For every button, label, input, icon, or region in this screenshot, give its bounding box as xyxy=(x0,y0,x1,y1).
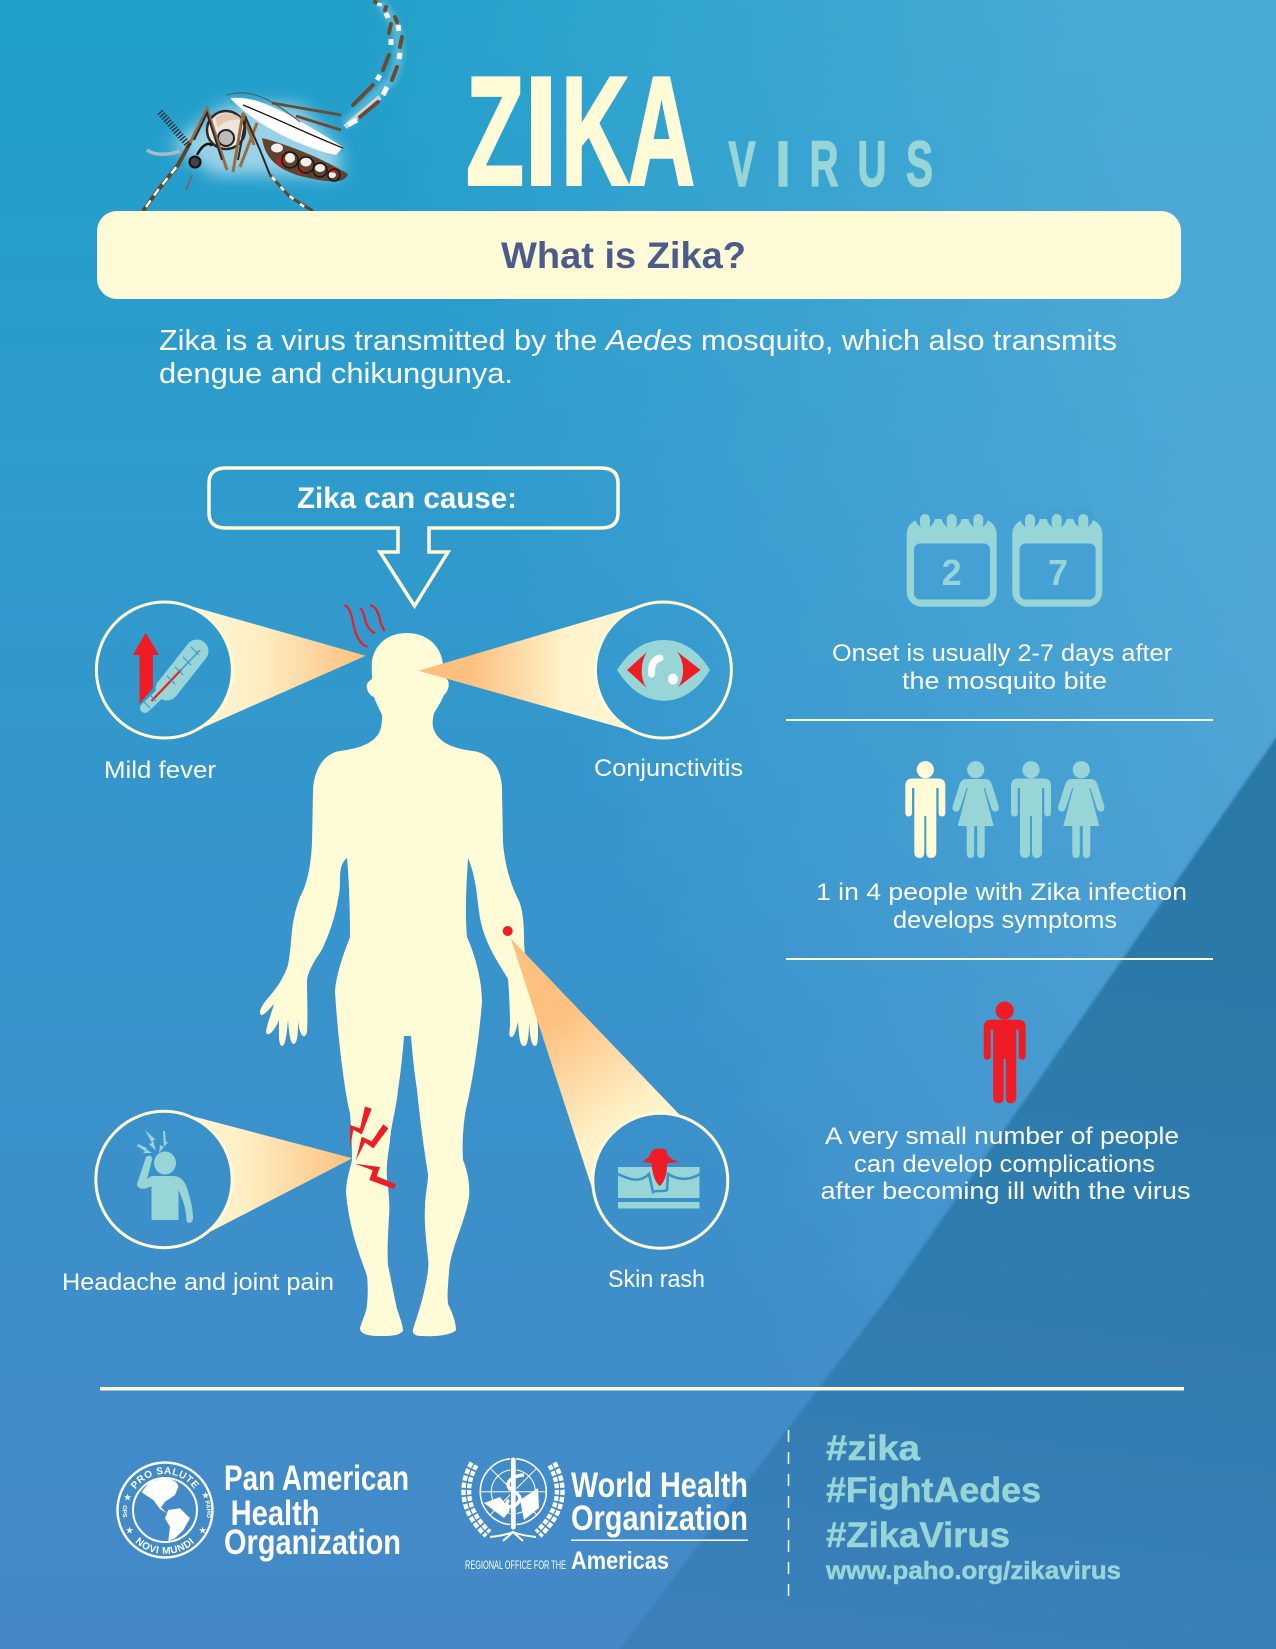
seal: ★ xyxy=(126,1526,134,1535)
icon: calendar 7: 7 xyxy=(1048,552,1068,593)
ring xyxy=(593,1113,728,1248)
hashtags xyxy=(825,1429,1121,1585)
icon: red eye xyxy=(617,640,710,701)
beam xyxy=(174,1111,352,1233)
hashtags: #ZikaVirus xyxy=(826,1516,1010,1555)
hashtags: #zika xyxy=(826,1429,921,1468)
title: VIRUS: R xyxy=(810,128,838,200)
seal: ★ xyxy=(124,1493,132,1502)
callout: Zika can cause xyxy=(209,468,618,606)
text xyxy=(816,879,1187,934)
intro text: Zika is a virus transmitted by the Aedes mosquito, which also transmits xyxy=(159,325,1117,357)
panel: 1 in 4 xyxy=(816,761,1187,934)
title: VIRUS: U xyxy=(858,128,886,200)
label: Mild fever xyxy=(104,757,216,784)
title: ZIKA xyxy=(466,44,695,218)
panel: headache and joint pain xyxy=(62,1111,352,1296)
intro text: dengue and chikungunya. xyxy=(159,358,513,390)
regional office xyxy=(465,1547,669,1575)
icon: calendar 2 xyxy=(907,506,997,607)
logo: WHO xyxy=(465,1457,748,1575)
beam xyxy=(418,604,643,731)
name xyxy=(224,1459,409,1562)
text: 1 in 4 people with Zika infection xyxy=(816,879,1187,906)
text: after becoming ill with the virus xyxy=(820,1178,1190,1205)
heading: What is Zika? xyxy=(501,235,746,276)
emblem xyxy=(466,1457,560,1541)
ring xyxy=(96,1111,232,1248)
text: can develop complications xyxy=(854,1151,1155,1178)
title: ZIKA: A xyxy=(628,44,695,218)
name: World Health xyxy=(571,1466,748,1505)
icon: skin rash xyxy=(618,1148,700,1208)
illustration: mosquito xyxy=(143,2,402,211)
logo: PAHO xyxy=(116,1459,409,1562)
icon: calendar 7 xyxy=(1012,506,1102,607)
text: develops symptoms xyxy=(893,907,1117,934)
label: Conjunctivitis xyxy=(594,755,743,782)
text xyxy=(832,640,1172,695)
label: Skin rash xyxy=(608,1266,705,1293)
icon: heat waves xyxy=(345,605,384,647)
panel: mild fever xyxy=(96,602,366,784)
marker: rash spot xyxy=(503,926,513,936)
icon: thermometer and up arrow xyxy=(133,633,200,708)
regional office: Americas xyxy=(571,1547,669,1575)
ring xyxy=(595,602,731,738)
panel: complications xyxy=(820,1002,1190,1205)
title: VIRUS: S xyxy=(906,128,933,200)
beam xyxy=(180,603,366,730)
icon: knee pain bolts xyxy=(350,1106,396,1189)
seal: ★ xyxy=(202,1491,210,1500)
name: Health xyxy=(231,1494,320,1533)
seal: PRO SALUTE xyxy=(130,1467,200,1489)
ring xyxy=(96,602,232,738)
hashtags: #FightAedes xyxy=(826,1471,1041,1510)
intro text xyxy=(159,325,1117,390)
label: Headache and joint pain xyxy=(62,1269,334,1296)
text: the mosquito bite xyxy=(902,668,1107,695)
panel: skin rash xyxy=(511,938,728,1293)
name xyxy=(571,1466,748,1538)
name: Organization xyxy=(571,1499,748,1538)
seal: PAHO xyxy=(205,1500,212,1518)
title: ZIKA: I xyxy=(524,44,558,218)
panel: onset xyxy=(832,506,1172,695)
hashtags: www.paho.org/zikavirus xyxy=(825,1557,1121,1585)
icon: person with headache xyxy=(137,1130,193,1223)
text: A very small number of people xyxy=(825,1123,1179,1150)
human body silhouette xyxy=(260,633,538,1336)
banner: What is Zika? xyxy=(97,211,1181,299)
callout: Zika can cause: Zika can cause: xyxy=(297,482,517,515)
icon: calendar 2: 2 xyxy=(942,552,962,593)
title: VIRUS: I xyxy=(776,128,790,200)
seal: ★ xyxy=(199,1526,207,1535)
title: ZIKA: Z xyxy=(466,44,524,218)
name: Organization xyxy=(224,1523,401,1562)
text xyxy=(820,1123,1190,1205)
icon: four people xyxy=(905,761,1105,858)
regional office: REGIONAL OFFICE FOR THE xyxy=(465,1558,566,1572)
name: Pan American xyxy=(224,1459,409,1498)
beam xyxy=(511,938,680,1192)
panel: conjunctivitis xyxy=(418,602,743,782)
title: VIRUS: V xyxy=(728,128,756,200)
icon: red person xyxy=(984,1002,1026,1103)
seal: OPS xyxy=(122,1505,128,1518)
seal: NOVI MUNDI xyxy=(135,1537,194,1554)
seal xyxy=(116,1461,214,1559)
text: Onset is usually 2-7 days after xyxy=(832,640,1172,667)
title: ZIKA: K xyxy=(561,44,629,218)
title: VIRUS xyxy=(728,128,933,200)
